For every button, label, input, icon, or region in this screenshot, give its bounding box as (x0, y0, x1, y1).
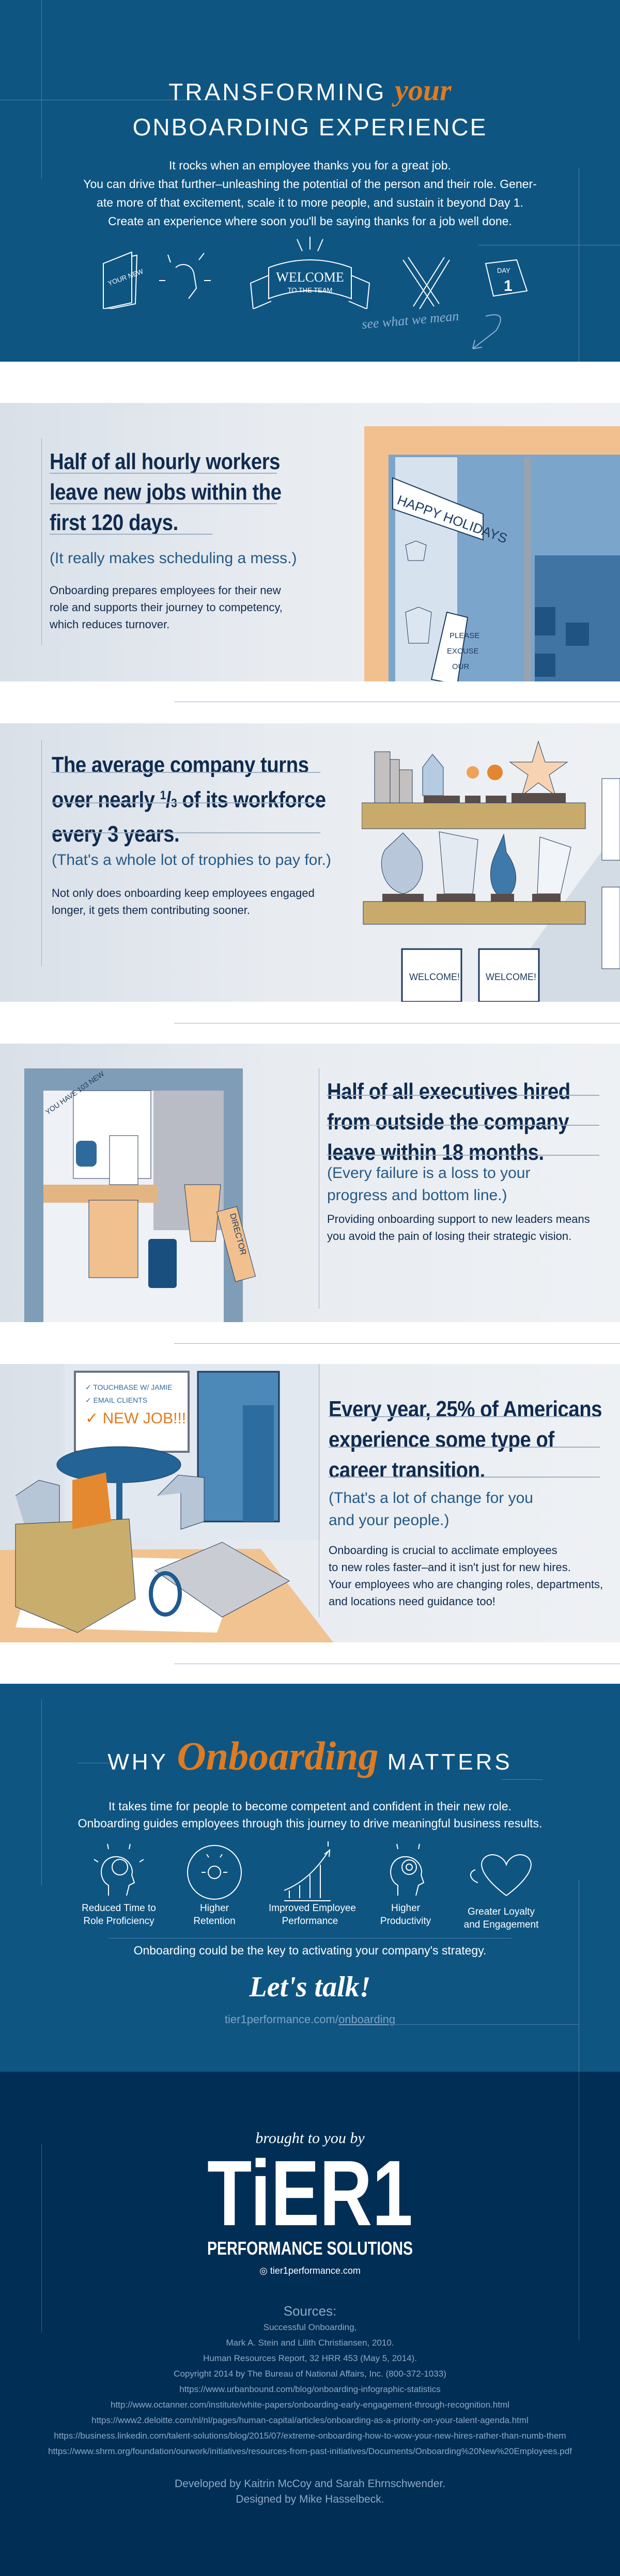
body text (329, 1544, 603, 1608)
body text: Onboarding is crucial to acclimate employees (329, 1544, 557, 1557)
why onboarding matters section: and Engagement (464, 1919, 538, 1930)
sources: Sources: (284, 2303, 336, 2319)
subheading (327, 1165, 530, 1204)
illustration: abandoned office: YOU HAVE 103 NEW (44, 1069, 106, 1116)
url: tier1performance.com/onboarding (225, 2013, 395, 2026)
illustration: trophy shelves: WELCOME! (409, 972, 460, 982)
body text: Providing onboarding support to new leaders means (327, 1213, 590, 1225)
credits: Designed by Mike Hasselbeck. (236, 2493, 384, 2505)
body text (50, 584, 283, 631)
icon: welcome banner: TO THE TEAM (288, 286, 332, 294)
why onboarding matters section: Performance (282, 1916, 338, 1927)
why onboarding matters section: Reduced Time to (82, 1903, 156, 1914)
body text: to new roles faster–and it isn't just for new hires. (329, 1561, 571, 1574)
icon: welcome banner: WELCOME (276, 270, 344, 285)
footer: http://www.octanner.com/institute/white-papers/onboarding-early-engagement-through-recognition.html (111, 2400, 509, 2410)
body text (327, 1213, 590, 1243)
footer: https://www2.deloitte.com/nl/nl/pages/human-capital/articles/onboarding-as-a-priority-on-your-talent-agenda.html (91, 2415, 529, 2425)
body text: role and supports their journey to competency, (50, 601, 283, 614)
illustration: shop window: HAPPY HOLIDAYS (395, 492, 509, 546)
headline: first 120 days. (50, 510, 178, 535)
headline: over nearly 1/3 of its workforce (52, 787, 326, 813)
body text: Onboarding prepares employees for their new (50, 584, 281, 597)
intro paragraph: ate more of that excitement, scale it to more people, and sustain it beyond Day 1. (97, 196, 523, 209)
intro text: It takes time for people to become competent and confident in their new role. (109, 1799, 512, 1813)
subheading: (That's a whole lot of trophies to pay for.) (52, 851, 331, 868)
illustration: trophy shelves: WELCOME! (486, 972, 536, 982)
body text: Your employees who are changing roles, departments, (329, 1578, 603, 1591)
let's talk: Let's talk! (250, 1971, 370, 2003)
icon: pencil and ruler (403, 257, 450, 309)
footer: Copyright 2014 by The Bureau of National Affairs, Inc. (800-372-1033) (174, 2369, 446, 2379)
why onboarding matters section: Role Proficiency (83, 1916, 154, 1927)
icon: calendar day 1: DAY (497, 267, 510, 274)
title (133, 73, 487, 141)
panel: career transition (0, 1364, 620, 1642)
illustration: trophy shelves (362, 741, 620, 1002)
why onboarding matters section: Retention (193, 1916, 236, 1927)
why onboarding matters section: Higher (391, 1903, 420, 1914)
illustration: abandoned office (24, 1068, 256, 1322)
intro paragraph: It rocks when an employee thanks you for a great job. (169, 159, 451, 172)
icon: calendar day 1 (486, 260, 527, 296)
icon: retention circle (188, 1845, 241, 1899)
headline (50, 449, 282, 535)
headline (329, 1396, 602, 1483)
footer: Mark A. Stein and Lilith Christiansen, 2010. (226, 2338, 394, 2348)
headline: experience some type of (329, 1427, 554, 1452)
illustration: shop window: PLEASE (450, 631, 479, 640)
icon: head with gear (391, 1844, 424, 1896)
headline (52, 752, 326, 847)
footer: https://www.shrm.org/foundation/ourwork/initiatives/resources-from-past-initiatives/Documents/Onboarding%20New%20Employees.pdf (48, 2446, 572, 2456)
icon: book (103, 252, 145, 310)
see what we mean: see what we mean (361, 308, 459, 332)
body text: and locations need guidance too! (329, 1595, 495, 1608)
icon row (103, 237, 528, 309)
body text: Not only does onboarding keep employees engaged (52, 887, 315, 899)
headline: Half of all hourly workers (50, 449, 280, 474)
icon: heart (471, 1855, 531, 1896)
footer: Successful Onboarding, (264, 2322, 357, 2332)
intro text (78, 1799, 542, 1830)
illustration: packed box and laptop: ✓ NEW JOB!!! (85, 1410, 186, 1427)
footer: https://www.urbanbound.com/blog/onboarding-infographic-statistics (179, 2384, 441, 2394)
icon: welcome banner (251, 237, 369, 309)
intro paragraph (83, 159, 537, 228)
body text: you avoid the pain of losing their strategic vision. (327, 1230, 571, 1243)
intro paragraph: You can drive that further–unleashing the potential of the person and their role. Gener- (83, 177, 537, 191)
headline: career transition. (329, 1457, 485, 1483)
why onboarding matters section: Improved Employee (269, 1903, 356, 1914)
subheading (329, 1489, 533, 1529)
illustration: shop window: OUR (452, 662, 469, 671)
panel: workforce turnover (0, 723, 620, 1002)
footer (0, 2072, 620, 2576)
benefit icons (94, 1841, 532, 1901)
icon: book: YOUR NEW (107, 267, 145, 287)
illustration: abandoned office: DIRECTOR (228, 1213, 247, 1256)
why onboarding matters section: Higher (200, 1903, 229, 1914)
panel: executives (0, 1044, 620, 1322)
illustration: packed box and laptop: ✓ EMAIL CLIENTS (85, 1396, 147, 1404)
headline: The average company turns (52, 752, 309, 778)
why onboarding matters section (0, 1684, 620, 2072)
intro paragraph: Create an experience where soon you'll be saying thanks for a job well done. (108, 214, 512, 228)
credits (175, 2478, 445, 2505)
icon: high five (159, 253, 211, 299)
why onboarding matters section: Productivity (380, 1916, 431, 1927)
headline: Every year, 25% of Americans (329, 1396, 602, 1422)
intro text: Onboarding guides employees through this journey to drive meaningful business results. (78, 1817, 542, 1830)
body text: which reduces turnover. (50, 618, 169, 631)
headline: leave new jobs within the (50, 479, 282, 505)
icon: growth chart (284, 1841, 331, 1901)
panel: hourly workers (0, 403, 620, 681)
headline: from outside the company (327, 1109, 569, 1135)
strategy statement: Onboarding could be the key to activating your company's strategy. (134, 1944, 486, 1957)
subheading: (That's a lot of change for you (329, 1489, 533, 1507)
subheading: progress and bottom line.) (327, 1187, 507, 1204)
subheading: (Every failure is a loss to your (327, 1165, 530, 1182)
footer: Human Resources Report, 32 HRR 453 (May 5, 2014). (203, 2353, 417, 2363)
headline: Half of all executives hired (327, 1079, 570, 1104)
title: ONBOARDING EXPERIENCE (133, 114, 487, 141)
subheading: and your people.) (329, 1512, 450, 1529)
footer: https://business.linkedin.com/talent-solutions/blog/2015/07/extreme-onboarding-how-to-wow-your-new-hires-rather-than-numb-them (54, 2431, 566, 2441)
illustration: shop window: EXCUSE (447, 647, 479, 656)
website: ◎ tier1performance.com (259, 2265, 361, 2276)
illustration: packed box and laptop (0, 1371, 333, 1642)
icon: calendar day 1: 1 (504, 277, 513, 294)
benefit labels (82, 1903, 538, 1930)
illustration: packed box and laptop: ✓ TOUCHBASE W/ JAMIE (85, 1383, 172, 1391)
why onboarding matters section: Greater Loyalty (468, 1906, 535, 1917)
headline: every 3 years. (52, 821, 179, 847)
subheading: (It really makes scheduling a mess.) (50, 550, 297, 567)
headline (327, 1079, 570, 1165)
section title: WHY Onboarding MATTERS (107, 1733, 513, 1778)
arrow (472, 314, 501, 349)
brought to you by: brought to you by (255, 2130, 365, 2147)
headline: leave within 18 months. (327, 1140, 544, 1165)
credits: Developed by Kaitrin McCoy and Sarah Ehrnschwender. (175, 2478, 445, 2490)
icon: head with globe (94, 1844, 144, 1896)
hero section (0, 0, 620, 362)
body text: longer, it gets them contributing sooner. (52, 904, 250, 917)
illustration: shop window (364, 426, 620, 681)
body text (52, 887, 315, 917)
title: TRANSFORMING your (168, 73, 452, 107)
